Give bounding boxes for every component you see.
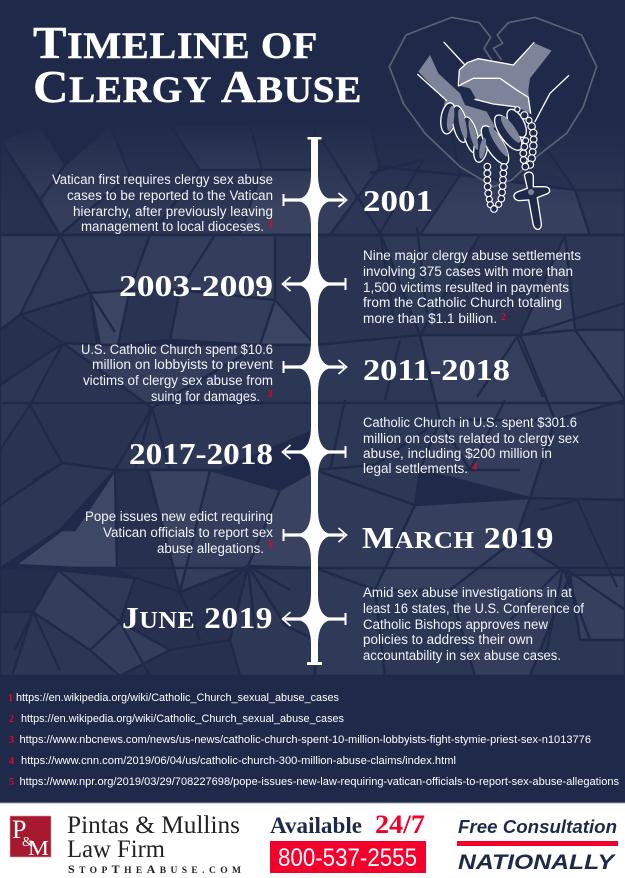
text block: June 2019 event: Amid sex abuse investigations in at [363, 585, 572, 600]
availability and phone: Available [270, 813, 362, 838]
text block: June 2019 event [363, 585, 584, 663]
source list: https://en.wikipedia.org/wiki/Catholic_Church_sexual_abuse_cases [21, 713, 344, 725]
availability and phone [270, 810, 426, 873]
text block: March 2019 event: 5 [268, 539, 273, 550]
text block: 2001 event: 1 [268, 219, 274, 230]
text block: 2011-2018 event: suing for damages. [151, 389, 260, 404]
text block: June 2019 event: policies to address their own [363, 632, 533, 647]
logo: P&M monogram: M [28, 836, 49, 860]
heading: 2017-2018: 2017-2018 [129, 436, 273, 471]
timeline node: March 2019 [282, 509, 346, 561]
icon: finger shading [446, 105, 523, 159]
availability and phone: 800-537-2555 [278, 844, 417, 872]
text block: 2003-2009 event: involving 375 cases with more than [363, 264, 573, 279]
icon: rosary beads [484, 107, 537, 212]
text block: June 2019 event: Catholic Bishops approves new [363, 617, 548, 632]
icon: cross [514, 172, 550, 229]
timeline node: 2017-2018 [282, 426, 346, 478]
footer panel [0, 802, 625, 878]
title [33, 17, 362, 112]
title: CLERGY ABUSE [33, 61, 362, 112]
source list: 2 [9, 714, 14, 725]
text block: 2011-2018 event: 3 [268, 389, 272, 400]
text block: 2001 event: Vatican first requires clergy sex abuse [52, 172, 273, 187]
text block: March 2019 event: Pope issues new edict requiring [85, 509, 273, 524]
text block: 2003-2009 event: from the Catholic Church totaling [363, 295, 562, 310]
text block: 2003-2009 event [363, 248, 581, 326]
text block: June 2019 event: least 16 states, the U.S. Conference of [363, 601, 584, 616]
source list: https://www.nbcnews.com/news/us-news/catholic-church-spent-10-million-lobbyists-fight-stymie-priest-sex-n1013776 [20, 734, 591, 746]
text block: 2001 event [52, 172, 274, 234]
text block: 2011-2018 event: million on lobbyists to prevent [92, 357, 273, 372]
source list: 5 [9, 777, 14, 788]
icon: broken heart with clasped hands and rosary [389, 17, 597, 229]
firm name: S TOP T HE A BUSE.COM [68, 862, 241, 876]
heading: 2003-2009: 2003-2009 [119, 268, 273, 303]
text block: June 2019 event: accountability in sex abuse cases. [363, 648, 561, 663]
icon: fingers [439, 102, 530, 168]
timeline spine [307, 137, 322, 665]
free consultation badge: NATIONALLY [458, 851, 616, 874]
source list: 3 [9, 735, 14, 746]
timeline node: June 2019 [282, 593, 346, 645]
text block: 2003-2009 event: 2 [501, 312, 506, 323]
text block: 2017-2018 event [363, 415, 579, 476]
heading: 2001: 2001 [363, 183, 433, 218]
heading: March 2019: MARCH 2019 [362, 520, 554, 555]
text block: 2011-2018 event: U.S. Catholic Church spent $10.6 [81, 342, 273, 357]
logo: P&M monogram: & [22, 835, 33, 850]
text block: 2017-2018 event: 4 [472, 462, 477, 473]
source list: 1 [8, 693, 13, 704]
free consultation badge: Free Consultation [458, 817, 617, 837]
heading: June 2019: JUNE 2019 [122, 600, 273, 635]
logo: P&M monogram: P [12, 815, 26, 844]
text block: 2001 event: hierarchy, after previously leaving [73, 204, 273, 219]
firm name: Pintas & Mullins [67, 812, 240, 839]
timeline node: 2001 [282, 174, 346, 226]
text block: 2001 event: management to local dioceses. [81, 219, 264, 234]
logo: P&M monogram [10, 815, 51, 860]
text block: 2017-2018 event: Catholic Church in U.S. spent $301.6 [363, 415, 577, 430]
free consultation badge [457, 817, 618, 874]
icon: upper hand [459, 43, 552, 113]
title: TIMELINE OF [33, 17, 318, 68]
text block: 2017-2018 event: abuse, including $200 million in [363, 446, 552, 461]
icon: lower arm and palm [418, 55, 495, 150]
text block: 2003-2009 event: 1,500 victims resulted in payments [363, 280, 569, 295]
text block: 2011-2018 event [81, 342, 273, 404]
timeline node: 2011-2018 [282, 341, 346, 393]
source list [8, 692, 619, 788]
source list: 4 [9, 756, 14, 767]
text block: 2011-2018 event: victims of clergy sex abuse from [83, 373, 273, 388]
text block: March 2019 event: Vatican officials to report sex [103, 525, 273, 540]
text block: March 2019 event: abuse allegations. [157, 541, 264, 556]
text block: 2003-2009 event: Nine major clergy abuse settlements [363, 248, 581, 263]
heading: 2011-2018: 2011-2018 [363, 352, 510, 387]
source list: https://www.cnn.com/2019/06/04/us/catholic-church-300-million-abuse-claims/index.html [21, 755, 456, 767]
text block: 2001 event: cases to be reported to the Vatican [67, 188, 273, 203]
text block: 2017-2018 event: million on costs related to clergy sex [363, 431, 579, 446]
firm name: Law Firm [67, 836, 166, 863]
background: stained glass pattern [0, 125, 625, 676]
text block: 2017-2018 event: legal settlements. [363, 461, 468, 476]
source list: https://www.npr.org/2019/03/29/708227698/pope-issues-new-law-requiring-vatican-officials-to-report-sex-abuse-allegations [20, 776, 619, 788]
availability and phone: 24/7 [375, 810, 425, 839]
icon: broken heart outline [389, 17, 597, 187]
text block: 2003-2009 event: more than $1.1 billion. [363, 311, 497, 326]
firm name [67, 812, 241, 876]
text block: March 2019 event [85, 509, 273, 556]
source list: https://en.wikipedia.org/wiki/Catholic_Church_sexual_abuse_cases [16, 692, 339, 704]
timeline node: 2003-2009 [282, 258, 346, 310]
